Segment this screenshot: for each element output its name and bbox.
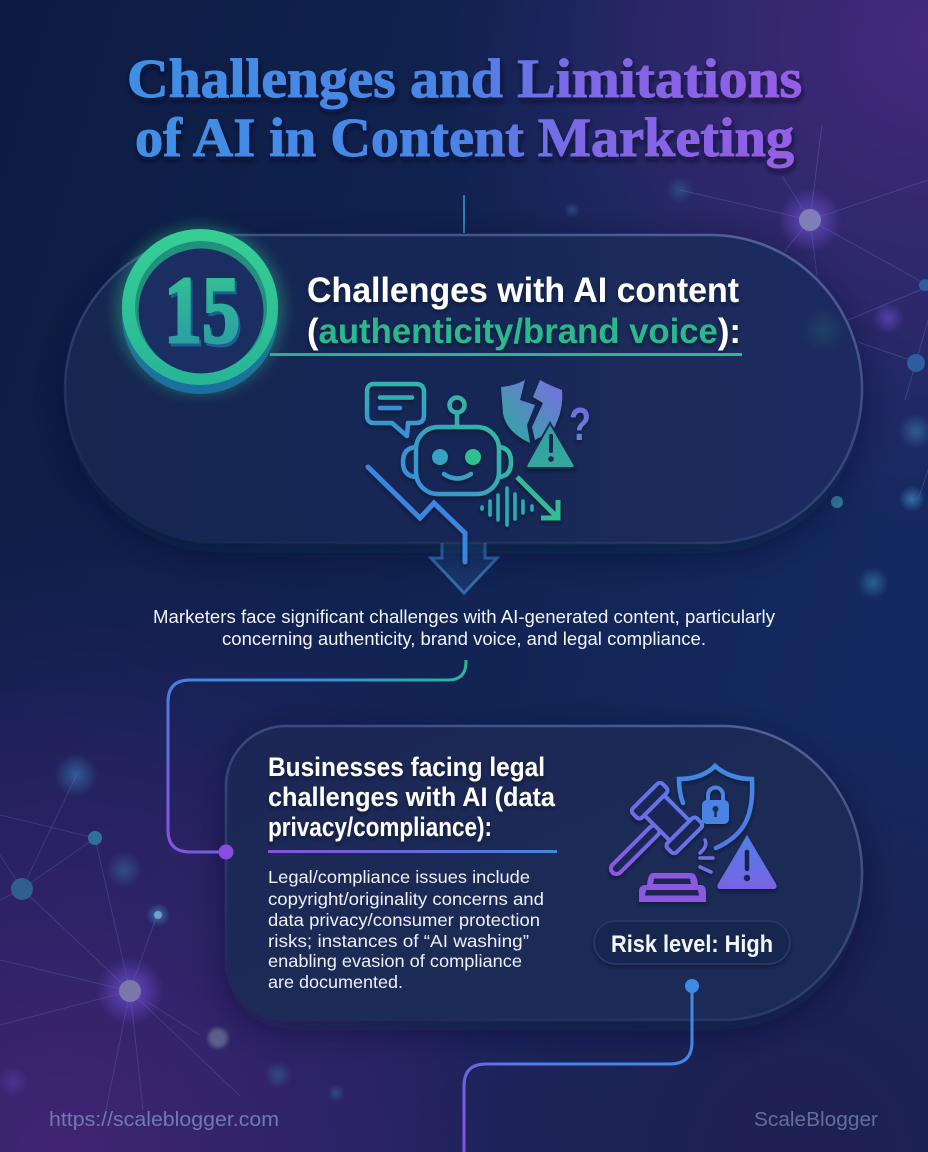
intro paragraph: Marketers face significant challenges with AI-generated content, particularly: [153, 607, 775, 627]
icon: AI content problems: [367, 380, 591, 562]
panel: legal challenges: [226, 726, 862, 1020]
connector: panel 2 to bottom: [464, 979, 699, 1152]
icon: warning triangle: [526, 423, 575, 468]
icon: gavel base: [639, 873, 706, 902]
icon: down arrow outline: [431, 540, 497, 593]
footer url: https://scaleblogger.com: [49, 1109, 279, 1131]
icon: warning triangle: [717, 835, 777, 889]
heading: challenges: [307, 271, 741, 351]
intro paragraph: concerning authenticity, brand voice, and legal compliance.: [222, 629, 706, 649]
badge: number 15: [116, 226, 284, 394]
intro paragraph: [153, 607, 775, 649]
icon: falling line: [368, 467, 465, 562]
body text: legal: are documented.: [268, 972, 403, 992]
body text: legal: enabling evasion of compliance: [268, 951, 522, 971]
icon: robot: [403, 398, 511, 494]
heading: legal: [268, 752, 555, 842]
icon: speech bubble: [367, 384, 424, 436]
badge: risk level: Risk level: High: [611, 931, 773, 958]
body text: legal: data privacy/consumer protection: [268, 910, 540, 930]
badge: risk level: [594, 921, 790, 964]
title: [127, 48, 802, 168]
heading: challenges: (authenticity/brand voice):: [307, 312, 741, 351]
body text: legal: [268, 867, 544, 992]
heading: legal: Businesses facing legal: [268, 752, 545, 782]
impact sparks: [700, 840, 713, 872]
icon: cracked shield: [501, 380, 535, 443]
network decoration: lower left: [0, 753, 345, 1110]
icon: sound wave: [482, 488, 532, 525]
network decoration: upper right: [564, 125, 928, 599]
panel: challenges with AI content: [65, 226, 862, 562]
connector: intro to panel 2: [168, 660, 466, 860]
top connector stub: [463, 195, 465, 233]
title: Challenges and Limitations: [127, 48, 802, 109]
badge: number 15: 15: [164, 257, 240, 363]
body text: legal: Legal/compliance issues include: [268, 867, 530, 887]
body text: legal: copyright/originality concerns and: [268, 889, 544, 909]
badge: number 15: 15: [166, 260, 242, 366]
icon: gavel: [591, 781, 704, 894]
footer brand: ScaleBlogger: [754, 1109, 878, 1131]
heading: legal: privacy/compliance):: [268, 812, 492, 842]
heading: challenges: Challenges with AI content: [307, 271, 739, 310]
icon: shield with lock: [679, 766, 752, 848]
heading: legal: challenges with AI (data: [268, 782, 555, 812]
heading underline: [268, 850, 557, 853]
title: of AI in Content Marketing: [135, 107, 794, 168]
icon: down arrow green: [517, 477, 558, 518]
body text: legal: risks; instances of “AI washing”: [268, 931, 529, 951]
icon: gavel, shield and warning: [591, 766, 777, 902]
icon: question mark: ?: [569, 398, 591, 450]
heading underline: [270, 353, 742, 356]
